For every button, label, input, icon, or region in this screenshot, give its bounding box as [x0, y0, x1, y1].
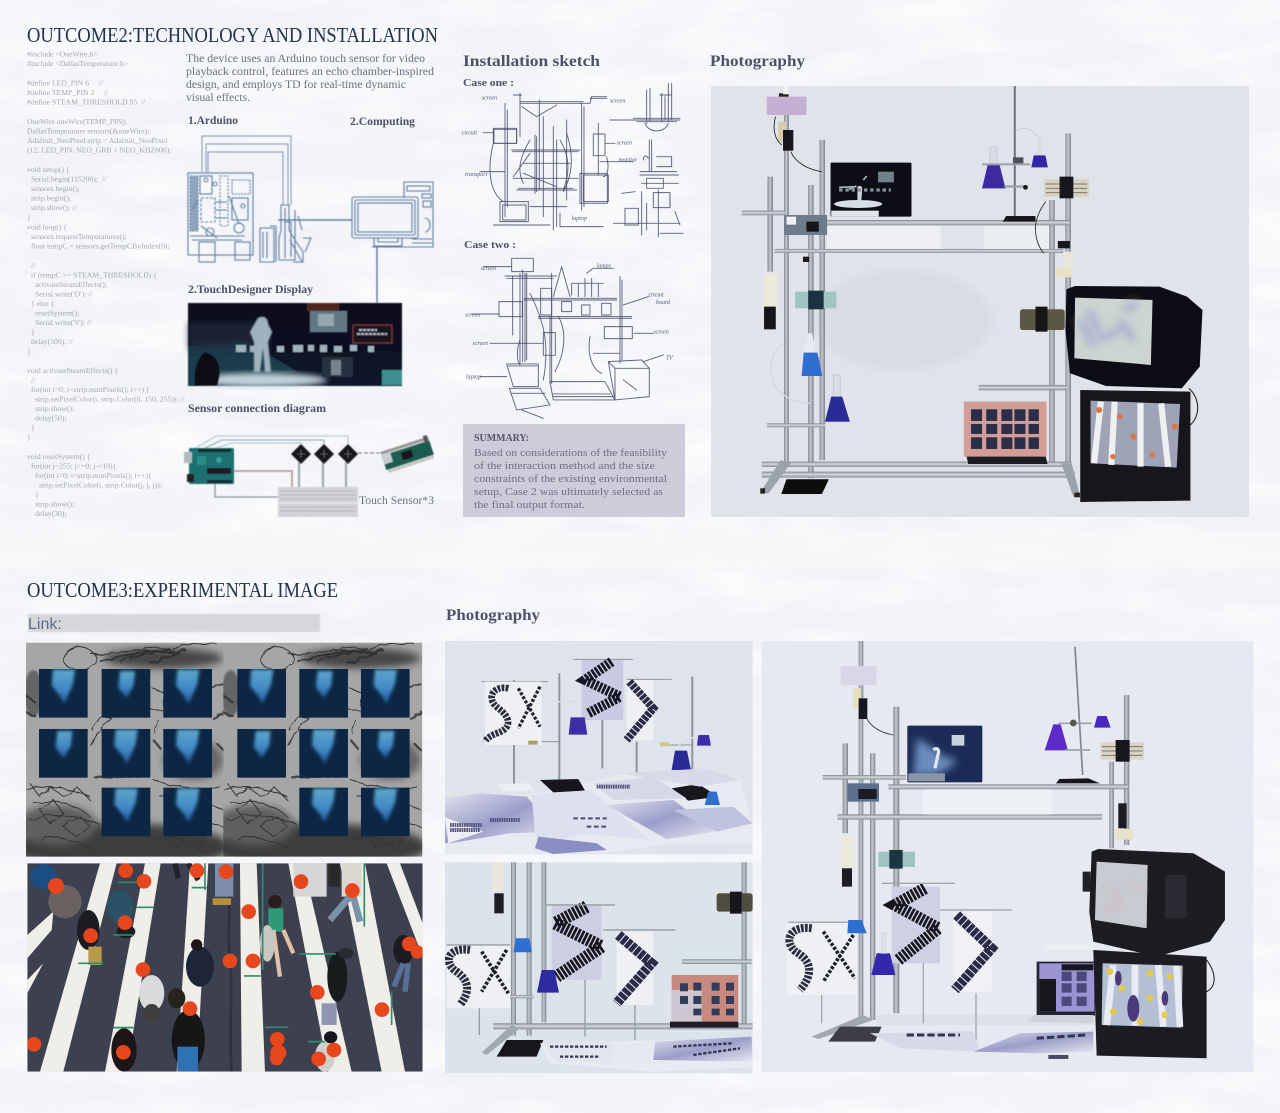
diagram: arduino, computer and wiring: [188, 136, 433, 303]
tablet: [670, 975, 738, 1028]
code listing: float tempC = sensors.getTempCByIndex(0);: [31, 242, 170, 250]
photo: detail of poster and frame: [445, 862, 753, 1073]
code listing: }: [27, 213, 31, 222]
summary text: [474, 447, 668, 511]
tv top: [1083, 849, 1225, 957]
code listing: strip.show();: [35, 404, 74, 413]
laptop: [831, 163, 911, 217]
code listing: sensors.begin();: [31, 184, 80, 193]
wires: [196, 436, 381, 497]
code listing: resetSystem();: [35, 308, 79, 318]
summary text: setup, Case 2 was ultimately selected as: [474, 486, 663, 498]
link row: [28, 614, 320, 633]
tv top: [1065, 286, 1202, 388]
clamp unit: [784, 215, 827, 235]
tablet: [964, 402, 1048, 464]
intro paragraph: visual effects.: [186, 92, 250, 104]
upper left device: [493, 862, 503, 892]
code listing: Serial.begin(115200); //: [31, 174, 107, 184]
summary text: constraints of the existing environmental: [474, 473, 667, 485]
intro paragraph: playback control, features an echo chamber-inspired: [186, 66, 434, 78]
photo: posters with booklets: [445, 641, 753, 854]
olive device: [717, 893, 753, 912]
code listing: delay(30);: [35, 509, 67, 518]
heading: 2.Computing: 2.Computing: [350, 116, 415, 128]
code listing: activateSteamEffects();: [35, 280, 107, 289]
heading: sensor connection diagram: Sensor connection diagram: [188, 403, 326, 415]
code listing: strip.setPixelColor(i, strip.Color(j, j, j));: [39, 480, 162, 490]
flasks upper: [982, 86, 1048, 222]
summary text: Based on considerations of the feasibility: [474, 447, 668, 459]
code listing: (12, LED_PIN, NEO_GRB + NEO_KHZ800);: [27, 146, 171, 154]
flasks lower: [847, 920, 867, 933]
flasks: [528, 702, 720, 805]
orange dots: [27, 863, 424, 1066]
control box: [847, 783, 879, 802]
title: outcome 3: OUTCOME3:EXPERIMENTAL IMAGE: [27, 578, 338, 602]
sketch: case one: circuit: [462, 130, 477, 136]
code listing: #include <OneWire.h>: [27, 50, 98, 58]
heading: case one: Case one :: [463, 77, 514, 89]
code listing: strip.setPixelColor(i, strip.Color(0, 150, 255)); //: [35, 394, 186, 404]
code listing: #define TEMP_PIN 2 //: [27, 88, 109, 97]
striped box and parts right: [1020, 177, 1089, 332]
code listing: strip.show();: [35, 500, 74, 508]
sketch: case one: screen: [617, 140, 632, 146]
flasks: [513, 938, 532, 952]
code listing: }: [31, 423, 35, 432]
sketch: case two: laptop: [466, 375, 481, 381]
code listing: }: [27, 432, 31, 442]
tv bottom: [1080, 388, 1198, 502]
posters: [447, 905, 675, 1040]
flasks lower: [802, 333, 850, 422]
sketch: case two: circuit: [648, 293, 664, 299]
panel: summary: [463, 424, 685, 517]
sketch: case two: lamps: [597, 264, 612, 270]
tiles: [39, 669, 410, 836]
clear panels: [923, 789, 1052, 815]
heading: 2.TouchDesigner Display: 2.TouchDesigner Display: [188, 284, 313, 296]
summary text: the final output format.: [474, 499, 585, 511]
link row: Link:: [28, 616, 62, 633]
code listing: if (tempC >= STEAM_THRESHOLD) {: [31, 270, 157, 280]
code listing: for(int i=0; i<strip.numPixels(); i++){: [35, 471, 152, 480]
code listing: void setup() {: [27, 165, 70, 174]
booklets: [543, 1037, 753, 1063]
booklets: [870, 1031, 1093, 1059]
frame: [812, 641, 1129, 1039]
icon: touch sensors: [291, 444, 358, 464]
base plate: [828, 1027, 882, 1042]
wire: sensor to computer: [278, 220, 377, 303]
crossing stripes: [27, 863, 423, 1072]
tablet: [1027, 962, 1095, 1023]
code listing: delay(500); //: [31, 337, 73, 346]
poles: [482, 862, 753, 1055]
sketch: case one: transport: [465, 172, 488, 178]
sketch: case one: monitor: [618, 158, 638, 164]
base plate: [497, 1040, 543, 1057]
sketch: case two: board: [656, 300, 670, 306]
sketch: case one: screen: [610, 98, 625, 104]
photo: full installation with posters: [762, 641, 1253, 1072]
code listing: Serial.write('D'); //: [35, 290, 93, 298]
floor of booklets: [445, 773, 753, 854]
heading: photography: Photography: [710, 53, 805, 70]
heading: installation sketch: Installation sketch: [463, 53, 600, 70]
code listing: #define LED_PIN 6 //: [27, 78, 104, 88]
asphalt crack: [228, 863, 232, 1072]
summary text: of the interaction method and the size: [474, 460, 655, 472]
code listing: //: [31, 261, 36, 270]
intro paragraph: The device uses an Arduino touch sensor for video: [186, 53, 425, 65]
icon: nano board: [380, 435, 435, 472]
left hanging parts: [763, 273, 836, 403]
code listing: DallasTemperature sensors(&oneWire);: [27, 126, 149, 136]
summary heading: SUMMARY:: [474, 433, 529, 444]
image: blue tile grid over cracks: [10, 643, 427, 870]
icon: arduino board line art: [188, 173, 253, 262]
sketch: case one: laptop: [572, 216, 587, 222]
code listing: Adafruit_NeoPixel strip = Adafruit_NeoPixel: [27, 136, 167, 145]
code listing: delay(50);: [35, 414, 67, 422]
code listing: OneWire oneWire(TEMP_PIN);: [27, 117, 127, 126]
heading: case two: Case two :: [464, 239, 516, 251]
sketch: case two: TV: [666, 355, 674, 361]
sketch: case two: screen: [465, 313, 480, 319]
title: outcome 2: OUTCOME2:TECHNOLOGY AND INSTALLATION: [27, 23, 438, 47]
icon: arduino uno: [184, 448, 234, 484]
code listing: strip.begin();: [31, 194, 71, 202]
sketch: case two: screen: [653, 329, 669, 335]
code listing: }: [27, 346, 31, 356]
code listing: sensors.requestTemperatures();: [31, 232, 127, 241]
wires: arduino to sensor: [202, 136, 291, 205]
stand with flasks: [1045, 647, 1144, 783]
pedestrians: [30, 863, 413, 1072]
green tracker lines: [78, 863, 392, 1042]
posters: [485, 660, 653, 745]
code listing: strip.show(); //: [31, 203, 77, 212]
stands: [482, 659, 693, 787]
code listing: #include <DallasTemperature.h>: [27, 59, 128, 68]
bases: [497, 779, 718, 801]
code listing: void loop() {: [27, 222, 67, 232]
code listing: Serial.write('S'); //: [35, 318, 92, 327]
pink panel and wiring: [767, 86, 822, 172]
icon: sensors line art: [260, 205, 311, 262]
photo: installation front view: [711, 86, 1249, 517]
intro paragraph: design, and employs TD for real-time dynamic: [186, 79, 406, 91]
sketch: case one: screen: [482, 95, 497, 101]
image: crowd crossing with orange tracking dots: [27, 863, 424, 1072]
icon: breadboard: [278, 487, 358, 517]
code listing: #define STEAM_THRESHOLD 95 //: [27, 98, 146, 106]
sketch: case two: screen: [473, 341, 488, 347]
diagram: sensor connection: [184, 435, 435, 517]
code listing: void activateSteamEffects() {: [27, 366, 118, 375]
sketch: case two: screen: [481, 266, 496, 272]
top devices: [841, 666, 1133, 887]
base plate: [781, 479, 829, 494]
code listing: void resetSystem() {: [27, 452, 90, 461]
icon: computer line art: [352, 182, 433, 247]
code listing: for(int j=255; j>=0; j-=10){: [31, 462, 116, 470]
floor of booklets: [540, 1037, 753, 1072]
heading: photography 2: Photography: [446, 607, 540, 624]
sketch: case two: [465, 258, 674, 418]
clear panels: [827, 226, 941, 250]
laptop: [907, 726, 982, 782]
frame poles: [742, 86, 1080, 497]
code listing: }: [35, 490, 39, 499]
sketch: case one: [462, 83, 683, 237]
code listing: for(int i=0; i<strip.numPixels(); i++) {: [31, 385, 150, 394]
label: touch sensor: Touch Sensor*3: [359, 493, 434, 507]
code listing: }: [31, 328, 35, 336]
image: TouchDesigner display: [188, 303, 402, 387]
code listing: //: [31, 376, 36, 384]
booklets: [445, 768, 753, 854]
intro paragraph: [186, 53, 434, 104]
tv bottom: [1093, 950, 1214, 1058]
heading: 1.Arduino: 1.Arduino: [188, 115, 238, 127]
code listing: } else {: [31, 299, 54, 308]
posters: [787, 883, 1012, 1040]
